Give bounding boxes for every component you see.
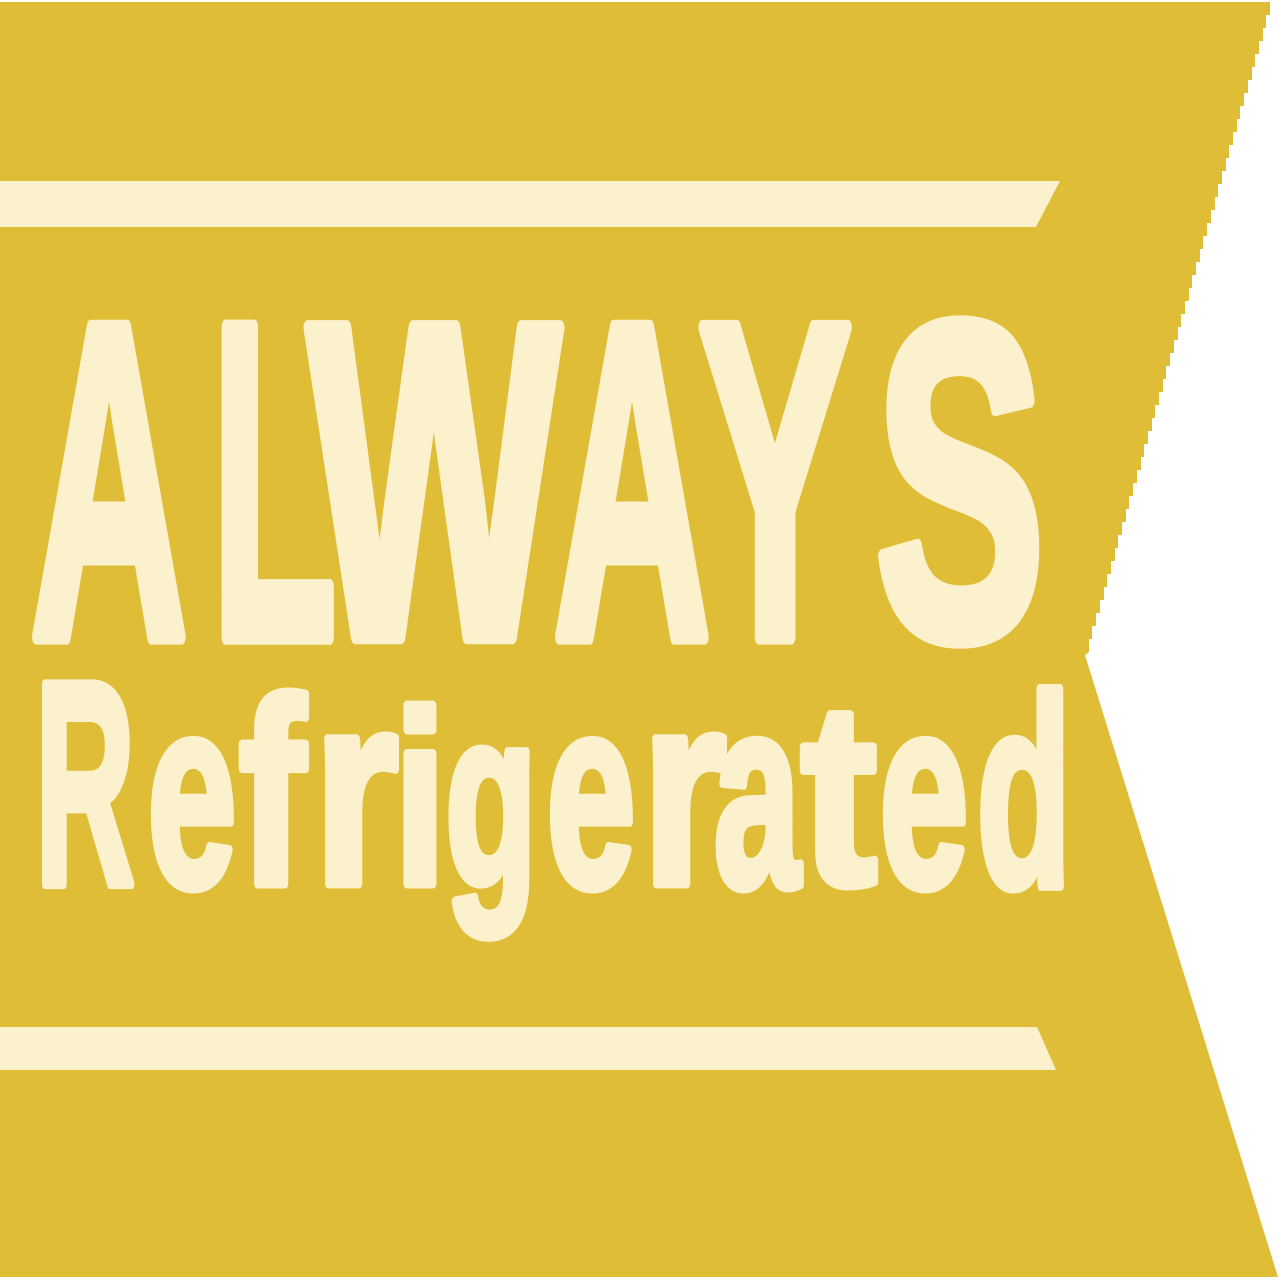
heading: ALWAYS: A xyxy=(553,230,711,732)
heading: ALWAYS: Y xyxy=(698,230,852,733)
heading: ALWAYS: L xyxy=(211,230,337,734)
subheading: Refrigerated: t xyxy=(801,650,877,940)
subheading: Refrigerated: r xyxy=(313,636,399,943)
subheading: Refrigerated: a xyxy=(714,642,801,944)
subheading: Refrigerated: R xyxy=(35,622,135,947)
subheading: Refrigerated: e xyxy=(148,643,236,944)
subheading: Refrigerated: i xyxy=(394,661,446,937)
subheading: Refrigerated: e xyxy=(547,643,635,944)
heading: ALWAYS: S xyxy=(875,230,1045,733)
bottom stripe xyxy=(0,1027,1056,1070)
heading: ALWAYS: A xyxy=(30,230,188,732)
subheading: Refrigerated: d xyxy=(977,640,1071,944)
subheading: Refrigerated: r xyxy=(641,636,727,943)
top stripe xyxy=(0,181,1060,227)
subheading: Refrigerated: e xyxy=(880,643,968,944)
heading: ALWAYS xyxy=(30,230,1045,734)
heading: ALWAYS: W xyxy=(308,231,563,733)
subheading: Refrigerated xyxy=(35,622,1071,947)
subheading: Refrigerated: g xyxy=(445,657,537,937)
subheading: Refrigerated: f xyxy=(239,644,306,940)
